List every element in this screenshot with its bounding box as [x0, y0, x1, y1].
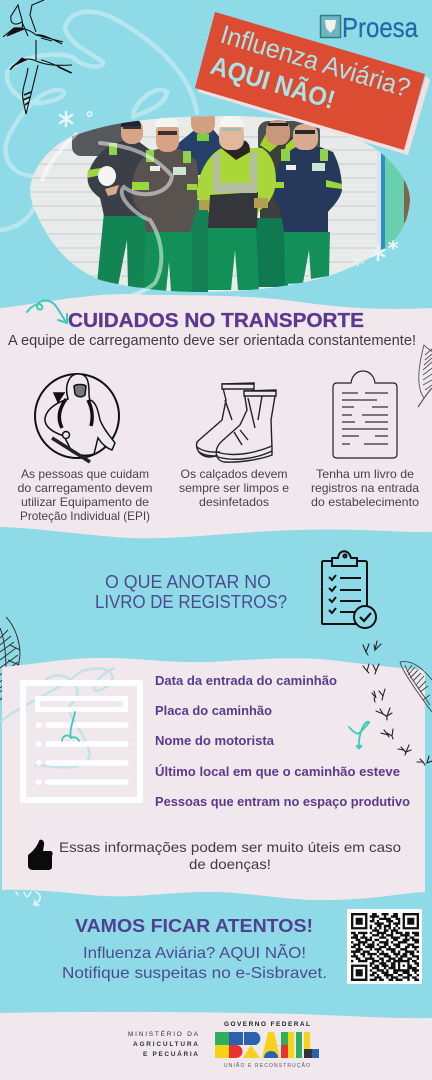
heading: o que anotar: LIVRO DE REGISTROS? [95, 592, 287, 612]
decorative swirl [0, 12, 197, 230]
text: EPI: Proteção Individual (EPI) [20, 509, 150, 523]
arrow: teal down [349, 722, 369, 748]
man 4 [197, 115, 276, 290]
logo: Governo Federal Brasil: UNIÃO E RECONSTRUÇÃO [224, 1062, 310, 1069]
man 2 [132, 116, 198, 292]
leaf: left of section two [0, 617, 20, 700]
icon: thumbs up [28, 840, 53, 870]
text: calçados: desinfetados [199, 495, 269, 509]
text: calçados: sempre ser limpos e [179, 481, 289, 495]
text: notifique suspeitas [62, 942, 327, 982]
text: livro de registros: do estabelecimento [311, 495, 419, 509]
heading: vamos ficar atentos: VAMOS FICAR ATENTOS! [75, 916, 313, 936]
heading: cuidados no transporte: CUIDADOS NO TRANSPORTE [68, 310, 364, 332]
icon: clipboard checklist [322, 551, 376, 628]
leaf: right of section one [418, 345, 432, 407]
back man [176, 116, 222, 292]
banner: Influenza Aviária? AQUI NÃO!: AQUI NÃO! [207, 50, 339, 115]
siding lines [25, 137, 380, 276]
icon: white checklist [23, 683, 140, 800]
logo: Ministério da Agricultura e Pecuária: MINISTÉRIO DA [128, 1029, 199, 1038]
list: data to record: Placa do caminhão [155, 704, 272, 718]
panel: cuidados no transporte [0, 294, 432, 538]
list: data to record: Nome do motorista [155, 734, 275, 748]
swirl over photo [42, 134, 172, 299]
man 1 [87, 118, 150, 288]
QR code [347, 909, 422, 984]
heading: o que anotar [95, 572, 287, 612]
icon: teal squiggle on checklist [62, 712, 79, 741]
back right man [254, 120, 298, 287]
heading: o que anotar: O QUE ANOTAR NO [105, 572, 271, 592]
icon: person in PPE [35, 374, 119, 462]
logo: Ministério da Agricultura e Pecuária: AGRICULTURA [133, 1041, 198, 1048]
note: useful information [59, 839, 401, 872]
logo: Ministério da Agricultura e Pecuária: E PECUÁRIA [143, 1049, 198, 1058]
panel: o que anotar [2, 658, 425, 900]
footer band [0, 1012, 432, 1080]
logo: Governo Federal Brasil: GOVERNO FEDERAL [224, 1021, 310, 1028]
photo: team in protective clothing [25, 108, 415, 295]
text: EPI: do carregamento devem [18, 481, 152, 495]
text: EPI: As pessoas que cuidam [21, 467, 149, 481]
text: livro de registros [311, 467, 419, 509]
bird footprints [363, 641, 432, 765]
text: notifique suspeitas: Influenza Aviária? AQUI NÃO! [83, 942, 306, 962]
text: EPI [18, 467, 152, 523]
list: data to record: Último local em que o caminhão esteve [155, 764, 400, 779]
arrow: white squiggle [16, 892, 40, 905]
text: EPI: utilizar Equipamento de [21, 495, 149, 509]
text: livro de registros: registros na entrada [311, 481, 419, 495]
banner: Influenza Aviária? AQUI NÃO!: Influenza Aviária? [217, 19, 414, 103]
list: data to record: Data da entrada do caminhão [155, 674, 337, 688]
arrow: teal loop [27, 300, 67, 323]
text: notifique suspeitas: Notifique suspeitas no e-Sisbravet. [62, 965, 327, 982]
list: data to record [155, 674, 410, 809]
subtitle: A equipe de carregamento deve ser orientada constantemente! [8, 333, 416, 349]
logo: Governo Federal Brasil [215, 1021, 319, 1069]
decorative swirl in panel [0, 668, 115, 768]
icon: flying birds [3, 0, 72, 114]
man 6 [274, 124, 342, 284]
logo: Ministério da Agricultura e Pecuária [128, 1029, 199, 1058]
banner: Influenza Aviária? AQUI NÃO! [195, 12, 430, 155]
sparkles [60, 112, 397, 266]
text: livro de registros: Tenha um livro de [316, 467, 414, 481]
text: calçados: Os calçados devem [180, 467, 288, 481]
icon: registry book [333, 371, 397, 458]
text: calçados [179, 467, 289, 509]
list: data to record: Pessoas que entram no espaço produtivo [155, 795, 410, 809]
icon: rubber boots [196, 383, 276, 462]
note: useful information: Essas informações podem ser muito úteis em caso [59, 839, 401, 855]
note: useful information: de doenças! [189, 856, 271, 872]
leaf: right of panel [400, 662, 432, 712]
logo: Proesa: Proesa [342, 12, 419, 43]
